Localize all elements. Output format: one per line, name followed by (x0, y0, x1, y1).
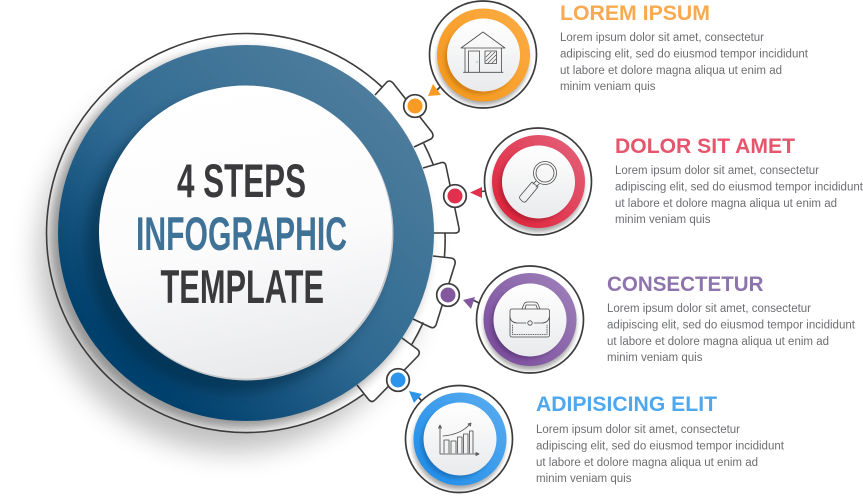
text block: Consectetur: adipiscing elit, sed do eiusmod tempor incididunt (607, 320, 856, 332)
blue disc (58, 45, 434, 421)
text block: Dolor Sit Amet: minim veniam quis (615, 214, 711, 226)
text block: Lorem Ipsum: adipiscing elit, sed do eiusmod tempor incididunt (560, 48, 809, 60)
text block: Dolor Sit Amet: Lorem ipsum dolor sit amet, consectetur (615, 165, 819, 177)
main circle shadow (39, 65, 425, 451)
text block: Adipisicing Elit: Lorem ipsum dolor sit amet, consectetur (536, 424, 740, 436)
text block: Consectetur: minim veniam quis (607, 352, 703, 364)
text block: Lorem Ipsum: minim veniam quis (560, 81, 656, 93)
arrow: red (470, 187, 486, 198)
node: purple (437, 284, 459, 306)
node: red (444, 185, 466, 207)
main circle group (46, 33, 459, 433)
white disc (99, 86, 392, 378)
step 3 circle (476, 266, 584, 373)
text block: Consectetur (607, 273, 856, 364)
arrow: orange (428, 84, 442, 96)
white disc edge (100, 86, 394, 380)
icon: house (461, 32, 505, 72)
node: orange (404, 95, 426, 117)
text block: Adipisicing Elit: minim veniam quis (536, 473, 632, 485)
step tabs (357, 81, 459, 402)
central title: 4 STEPS (177, 155, 306, 208)
text block: Consectetur: ut labore et dolore magna aliqua ut enim ad (607, 336, 829, 348)
text block: Lorem Ipsum (560, 2, 809, 93)
text block: Dolor Sit Amet (615, 135, 863, 226)
step 4 circle (406, 386, 512, 492)
step 1 circle (430, 1, 536, 108)
icon: growth chart (438, 423, 479, 456)
icon: magnifier (520, 162, 556, 202)
central title: TEMPLATE (160, 261, 324, 314)
text block: Adipisicing Elit (536, 393, 785, 485)
shadow of white disc (86, 97, 382, 393)
text block: Dolor Sit Amet: adipiscing elit, sed do eiusmod tempor incididunt (615, 182, 863, 194)
node: blue (387, 369, 409, 391)
outer disc background (46, 34, 446, 432)
text block: Adipisicing Elit: ut labore et dolore magna aliqua ut enim ad (536, 457, 758, 469)
text block: Consectetur: Lorem ipsum dolor sit amet, consectetur (607, 303, 811, 315)
inner shadow of blue disc (49, 51, 427, 429)
central title: INFOGRAPHIC (136, 208, 347, 261)
arrow: blue (409, 391, 423, 403)
text block: Lorem Ipsum: ut labore et dolore magna aliqua ut enim ad (560, 65, 782, 77)
outer outline arcs (47, 33, 445, 432)
icon: briefcase (510, 302, 550, 337)
text block: Lorem Ipsum: LOREM IPSUM (560, 2, 710, 25)
step 2 circle (484, 128, 592, 235)
text block: Adipisicing Elit: adipiscing elit, sed do eiusmod tempor incididunt (536, 440, 785, 452)
text block: Dolor Sit Amet: DOLOR SIT AMET (615, 135, 795, 158)
central title (136, 155, 347, 314)
text block: Consectetur: CONSECTETUR (607, 273, 764, 296)
text block: Lorem Ipsum: Lorem ipsum dolor sit amet, consectetur (560, 32, 764, 44)
text block: Adipisicing Elit: ADIPISICING ELIT (536, 393, 717, 416)
arrow: purple (463, 297, 479, 309)
text block: Dolor Sit Amet: ut labore et dolore magna aliqua ut enim ad (615, 198, 837, 210)
